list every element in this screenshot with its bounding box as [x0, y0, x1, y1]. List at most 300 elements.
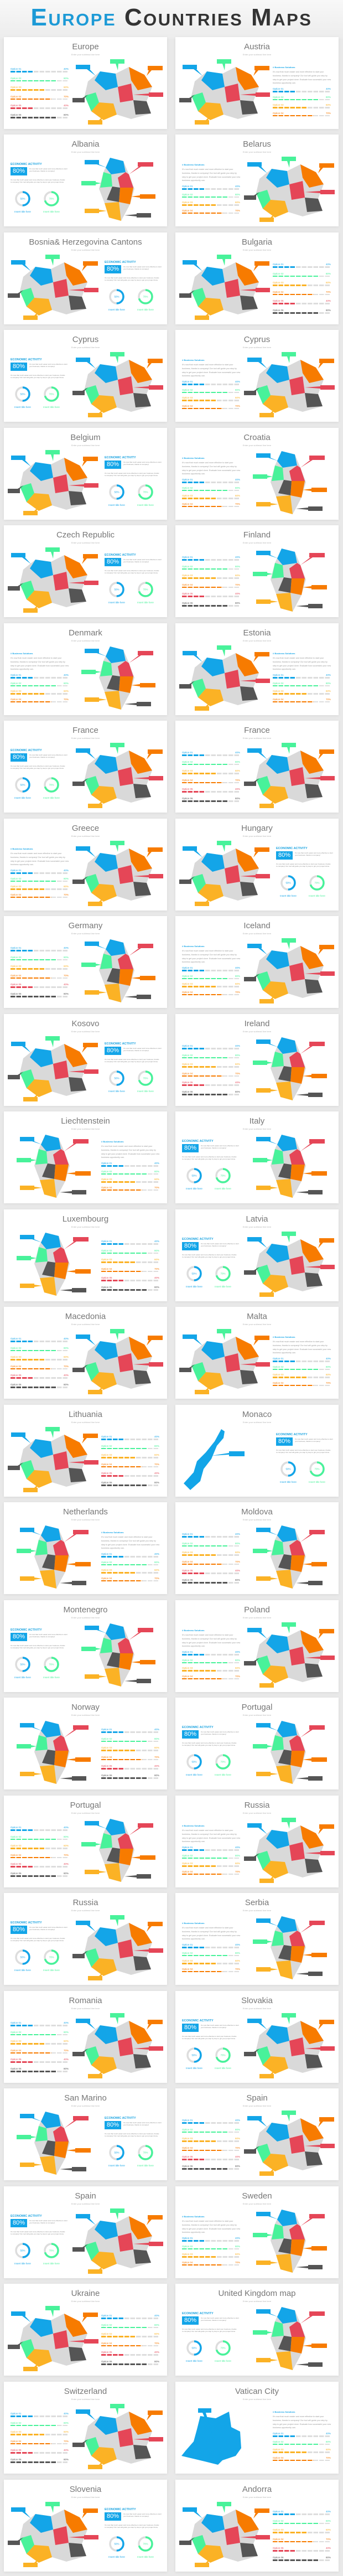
subhead: Enter your subhead line here [71, 1518, 100, 1521]
options chart: Option 05 [101, 2351, 112, 2353]
panel: Portugal (economic) [175, 1698, 339, 1789]
business text block: 40% [154, 1553, 159, 1555]
economic activity block: 80% [107, 558, 119, 565]
business text block [182, 1922, 241, 1977]
panel: Croatia [175, 428, 339, 520]
economic activity block: 50% [114, 1077, 119, 1079]
title: Slovakia [241, 1996, 273, 2005]
map [179, 645, 270, 711]
business text block: Option 04 [182, 1967, 193, 1970]
options chart: Option 04 [101, 1756, 112, 1758]
economic activity block: 50% [114, 296, 119, 298]
economic activity block [182, 2019, 242, 2070]
options chart: 40% [326, 2547, 331, 2549]
business text block: 70% [64, 893, 69, 896]
business text block: Option 02 [182, 1854, 193, 1856]
options chart: 80% [64, 2422, 69, 2424]
options chart: Option 02 [11, 1347, 22, 1349]
options chart: Option 01 [182, 1044, 193, 1047]
economic activity block: 80% [184, 2317, 196, 2324]
economic activity block: Insert title here [108, 2556, 125, 2558]
business text block: 70% [235, 503, 240, 505]
options chart: Option 03 [101, 1258, 112, 1261]
title: Czech Republic [56, 530, 115, 540]
economic activity block [182, 2312, 242, 2363]
options chart: Option 04 [182, 583, 193, 586]
subhead: Enter your subhead line here [243, 2007, 271, 2010]
title: Vatican City [235, 2387, 279, 2396]
business text block: # Business Solutions [101, 1531, 123, 1534]
options chart: Option 02 [11, 2031, 22, 2034]
business text block: Option 03 [182, 1959, 193, 1962]
options chart: 80% [235, 565, 240, 568]
economic activity block: Insert title here [43, 1676, 60, 1679]
panel: Czech Republic [4, 525, 167, 617]
business text block: Option 02 [182, 1952, 193, 1954]
options chart: Option 02 [182, 565, 193, 568]
subhead: Enter your subhead line here [243, 151, 271, 153]
title: Croatia [243, 433, 271, 442]
business text block: Option 02 [101, 1170, 112, 1172]
options chart: Option 06 [11, 1872, 22, 1875]
business text block: 80% [154, 1170, 159, 1172]
business text block: 80% [326, 95, 331, 99]
economic activity block: It's now that much easier and more effective to start your business, thanks to company! Our tool will guide you step by step to get your project done. [11, 1937, 65, 1942]
map [178, 2403, 271, 2471]
options chart: 80% [326, 309, 331, 312]
title: Russia [245, 1801, 269, 1810]
map [7, 1230, 100, 1299]
panel: Liechtenstein [4, 1111, 167, 1203]
options chart: Option 04 [101, 1463, 112, 1466]
options chart: 80% [64, 1835, 69, 1838]
options chart: 80% [64, 2031, 69, 2034]
options chart: Option 01 [101, 1435, 112, 1438]
economic activity block: It's now that much easier and more effective to start your business, thanks to company! Our tool will guide you step by step to get your project done. [105, 277, 159, 281]
business text block: 40% [326, 2432, 331, 2435]
economic activity block: 70% [314, 1468, 320, 1470]
economic activity block: It's now that much easier and more effective to start your business, thanks to company! Our tool will guide you step by step to get your project done. [182, 2328, 236, 2332]
map [7, 2501, 100, 2569]
economic activity block: It's now that much easier and more effective to start your business, thanks to company! Our tool will guide you step by step to get your project done. [11, 179, 65, 183]
options chart: 80% [154, 1445, 159, 1447]
map [7, 1523, 100, 1592]
business text block: 70% [64, 697, 69, 701]
options chart: 40% [235, 788, 240, 790]
business text block: It's now that much easier and more effective to start your business, thanks to company! Our tool will guide you step by step to get your project done. Evaluate how successful your new business opportunity can. [182, 1634, 240, 1647]
economic activity block: ECONOMIC ACTIVITY [182, 1726, 214, 1729]
options chart: Option 06 [11, 1383, 22, 1386]
options chart: Option 03 [11, 1844, 22, 1847]
economic activity block: Insert title here [215, 2067, 231, 2070]
options chart: Option 04 [101, 2342, 112, 2345]
title: Latvia [246, 1214, 268, 1224]
title: United Kingdom map [218, 2289, 296, 2298]
economic activity block: Insert title here [108, 1090, 125, 1093]
subhead: Enter your subhead line here [243, 1127, 271, 1130]
options chart: 70% [64, 95, 69, 98]
options chart: Option 04 [11, 1854, 22, 1856]
business text block: 70% [235, 2261, 240, 2264]
economic activity block [11, 2215, 70, 2265]
business text block: 80% [235, 974, 240, 977]
options chart: Option 05 [101, 1472, 112, 1475]
title: Kosovo [71, 1019, 100, 1028]
map [71, 2403, 164, 2471]
business text block: # Business Solutions [182, 163, 204, 166]
title: Poland [244, 1605, 270, 1615]
map [243, 1523, 336, 1592]
options chart: Option 01 [273, 2510, 284, 2513]
options chart [11, 2412, 69, 2468]
options chart: 60% [64, 1844, 69, 1847]
subhead: Enter your subhead line here [243, 1616, 271, 1619]
options chart: 70% [235, 779, 240, 782]
economic activity block: It's now that much easier and more effective to start your business, thanks to company! [123, 2513, 162, 2517]
economic activity block: 70% [143, 2543, 148, 2545]
options chart: Option 04 [182, 779, 193, 782]
options chart: Option 01 [11, 68, 22, 70]
economic activity block: Insert title here [215, 1285, 231, 1288]
economic activity block: Insert title here [108, 308, 125, 311]
options chart: 70% [64, 2440, 69, 2443]
options chart: 70% [64, 1365, 69, 1368]
business text block: It's now that much easier and more effective to start your business, thanks to company! Our tool will guide you step by step to get your project done. Evaluate how successful your new business opportunity can. [182, 364, 240, 377]
business text block: Option 04 [101, 1186, 112, 1189]
options chart: 60% [235, 1551, 240, 1554]
options chart: 40% [235, 1081, 240, 1084]
panel: France (economic) [4, 721, 167, 813]
subhead: Enter your subhead line here [243, 249, 271, 251]
business text block: # Business Solutions [273, 1336, 295, 1338]
options chart: Option 04 [11, 974, 22, 977]
economic activity block: 50% [114, 490, 119, 494]
options chart: 80% [235, 1579, 240, 1581]
subhead: Enter your subhead line here [243, 932, 271, 935]
business text block: 80% [235, 1952, 240, 1954]
map [243, 1719, 336, 1787]
options chart: 80% [235, 1542, 240, 1545]
business text block: It's now that much easier and more effective to start your business, thanks to company! Our tool will guide you step by step to get your project done. Evaluate how successful your new business opportunity can. [182, 1829, 240, 1843]
subhead: Enter your subhead line here [243, 2104, 271, 2107]
title: Andorra [242, 2485, 272, 2494]
options chart: 40% [64, 946, 69, 949]
panel: Norway [4, 1698, 167, 1789]
business text block: It's now that much easier and more effective to start your business, thanks to company! Our tool will guide you step by step to get your project done. Evaluate how successful your new business opportunity can. [273, 2415, 331, 2429]
options chart: 60% [64, 965, 69, 968]
economic activity block: Insert title here [43, 210, 60, 213]
title: Cyprus [72, 335, 98, 344]
economic activity block: 50% [191, 1175, 197, 1177]
panel: Spain (economic) [4, 2186, 167, 2278]
economic activity block: 50% [114, 2543, 119, 2545]
economic activity block: 50% [285, 1468, 291, 1470]
options chart: Option 01 [11, 2021, 22, 2024]
options chart: 60% [64, 2430, 69, 2433]
options chart [11, 1337, 69, 1393]
subhead: Enter your subhead line here [71, 444, 100, 447]
economic activity block: ECONOMIC ACTIVITY [276, 847, 308, 850]
title: Moldova [241, 1507, 273, 1517]
economic activity block: ECONOMIC ACTIVITY [276, 1433, 308, 1436]
panel: United Kingdom map [175, 2284, 339, 2376]
business text block: 40% [235, 1943, 240, 1946]
business text block: It's now that much easier and more effective to start your business, thanks to company! Our tool will guide you step by step to get your project done. Evaluate how successful your new business opportunity can. [182, 168, 240, 182]
options chart: 40% [64, 104, 69, 107]
economic activity block: 80% [184, 1731, 196, 1737]
title: Lithuania [69, 1410, 102, 1419]
economic activity block: Insert title here [137, 1090, 154, 1093]
business text block: Option 04 [11, 697, 22, 701]
options chart: Option 03 [182, 2137, 193, 2140]
panel: Ukraine [4, 2284, 167, 2376]
panel: Romania [4, 1991, 167, 2083]
options chart [273, 2510, 331, 2565]
economic activity block: 70% [220, 1175, 226, 1177]
options chart: 70% [235, 583, 240, 586]
economic activity block: It's now that much easier and more effective to start your business, thanks to company! Our tool will guide you step by step to get your project done. [105, 2133, 159, 2137]
business text block: Option 03 [11, 885, 22, 888]
map [253, 451, 327, 514]
title: Slovenia [70, 2485, 101, 2494]
economic activity block: 80% [13, 1633, 25, 1640]
economic activity block: 80% [184, 2024, 196, 2031]
subhead: Enter your subhead line here [71, 1127, 100, 1130]
economic activity block: ECONOMIC ACTIVITY [182, 1140, 214, 1143]
economic activity block: ECONOMIC ACTIVITY [105, 554, 136, 557]
options chart: 80% [64, 77, 69, 80]
economic activity block: Insert title here [137, 601, 154, 604]
business text block: Option 03 [273, 1373, 284, 1376]
subhead: Enter your subhead line here [71, 151, 100, 153]
options chart: Option 05 [101, 1276, 112, 1279]
options chart [182, 751, 240, 802]
options chart: 80% [235, 1054, 240, 1057]
economic activity block: 50% [20, 393, 25, 395]
options chart: Option 01 [182, 2119, 193, 2122]
subhead: Enter your subhead line here [71, 1030, 100, 1033]
map [243, 2012, 336, 2081]
options chart: 40% [235, 1569, 240, 1572]
options chart: Option 01 [11, 1826, 22, 1829]
options chart: 40% [235, 2155, 240, 2158]
economic activity block: Insert title here [280, 1481, 297, 1483]
business text block: Option 04 [182, 1675, 193, 1677]
map [243, 2109, 336, 2178]
business text block [182, 945, 240, 995]
options chart: 70% [235, 1072, 240, 1075]
business text block [182, 359, 240, 409]
options chart: Option 06 [11, 2067, 22, 2070]
economic activity block: ECONOMIC ACTIVITY [11, 2215, 42, 2218]
economic activity block: It's now that much easier and more effective to start your business, thanks to company! Our tool will guide you step by step to get your project done. [276, 863, 330, 867]
options chart: 80% [235, 1090, 240, 1093]
options chart: 70% [235, 1560, 240, 1563]
subhead: Enter your subhead line here [243, 1909, 271, 1912]
business text block: Option 01 [182, 1943, 193, 1946]
options chart: Option 03 [11, 86, 22, 89]
business text block: It's now that much easier and more effective to start your business, thanks to company! Our tool will guide you step by step to get your project done. Evaluate how successful your new business opportunity can. [273, 657, 331, 670]
subhead: Enter your subhead line here [243, 2202, 271, 2205]
title: Romania [69, 1996, 102, 2005]
economic activity block: 50% [114, 588, 119, 591]
title: Serbia [245, 1898, 269, 1907]
panel: Vatican City [175, 2382, 339, 2474]
business text block: Option 04 [182, 2261, 193, 2264]
panel: Russia (economic) [4, 1893, 167, 1985]
map [179, 59, 270, 125]
options chart: Option 03 [182, 769, 193, 772]
economic activity block: 70% [49, 1956, 54, 1958]
business text block [182, 1824, 241, 1880]
business text block: 60% [154, 1178, 159, 1181]
title: Luxembourg [63, 1214, 108, 1224]
options chart: Option 01 [182, 1533, 193, 1535]
options chart: Option 03 [11, 965, 22, 968]
economic activity block [105, 2508, 164, 2559]
options chart: Option 06 [182, 797, 193, 800]
business text block: Option 02 [273, 95, 284, 99]
options chart: 80% [64, 113, 69, 116]
economic activity block: ECONOMIC ACTIVITY [182, 2312, 214, 2315]
options chart: 70% [154, 1268, 159, 1270]
options chart: 60% [154, 2332, 159, 2335]
business text block: Option 04 [182, 1870, 193, 1873]
panel: Serbia [175, 1893, 339, 1985]
subhead: Enter your subhead line here [71, 2398, 100, 2401]
options chart: Option 02 [182, 1054, 193, 1057]
options chart: Option 02 [101, 1445, 112, 1447]
economic activity block: Insert title here [43, 1969, 60, 1972]
map [243, 1914, 336, 1983]
map [81, 158, 155, 221]
options chart: 40% [326, 263, 331, 266]
options chart: 60% [235, 1063, 240, 1065]
business text block: 40% [235, 478, 240, 481]
panel: Cyprus (economic) [4, 330, 167, 422]
panel: Latvia [175, 1209, 339, 1301]
business text block: 40% [154, 1162, 159, 1165]
business text block: 40% [235, 1651, 240, 1653]
business text block: # Business Solutions [11, 847, 33, 850]
economic activity block: 80% [107, 266, 119, 272]
subhead: Enter your subhead line here [71, 1225, 100, 1228]
business text block: Option 02 [182, 486, 193, 489]
options chart: 60% [326, 281, 331, 284]
subhead: Enter your subhead line here [243, 541, 271, 544]
economic activity block: ECONOMIC ACTIVITY [11, 163, 42, 166]
title: Monaco [242, 1410, 272, 1419]
economic activity block: 80% [107, 461, 119, 468]
economic activity block: It's now that much easier and more effective to start your business, thanks to company! Our tool will guide you step by step to get your project done. [105, 1058, 159, 1063]
options chart [101, 1435, 159, 1491]
subhead: Enter your subhead line here [71, 2202, 100, 2205]
panel: Switzerland [4, 2382, 167, 2474]
business text block: 70% [154, 1576, 159, 1580]
business text block: Option 01 [182, 1651, 193, 1653]
business text block: 80% [64, 877, 69, 880]
business text block: 60% [326, 690, 331, 692]
subhead: Enter your subhead line here [243, 1518, 271, 1521]
map [7, 1719, 100, 1787]
map [243, 1817, 336, 1885]
options chart: Option 06 [101, 2360, 112, 2363]
panel: Bosnia & Herzegovina Cantons [4, 232, 167, 324]
business text block: Option 03 [101, 1178, 112, 1181]
options chart: 70% [64, 2049, 69, 2052]
subhead: Enter your subhead line here [243, 1714, 271, 1716]
options chart: Option 06 [182, 602, 193, 604]
panel: Malta [175, 1307, 339, 1399]
business text block [11, 847, 69, 898]
options chart [11, 2021, 69, 2077]
options chart: 40% [154, 1765, 159, 1767]
panel: Denmark [4, 623, 167, 715]
business text block: 70% [235, 991, 240, 993]
title: Germany [69, 921, 102, 930]
options chart: 60% [326, 2528, 331, 2531]
options chart: 60% [154, 1258, 159, 1261]
subhead: Enter your subhead line here [243, 1225, 271, 1228]
economic activity block: It's now that much easier and more effective to start your business, thanks to company! [295, 852, 333, 856]
options chart: 80% [64, 1347, 69, 1349]
economic activity block: Insert title here [43, 2262, 60, 2265]
business text block [182, 2215, 241, 2270]
options chart: 60% [64, 2040, 69, 2042]
business text block: Option 01 [182, 478, 193, 481]
options chart: 40% [64, 68, 69, 70]
map [71, 1817, 164, 1885]
business text block: It's now that much easier and more effective to start your business, thanks to company! Our tool will guide you step by step to get your project done. Evaluate how successful your new business opportunity can. [101, 1145, 159, 1158]
options chart: 80% [64, 1383, 69, 1386]
options chart: Option 02 [101, 1737, 112, 1740]
business text block: Option 02 [11, 682, 22, 684]
economic activity block [11, 163, 67, 213]
subhead: Enter your subhead line here [243, 444, 271, 447]
business text block: Option 02 [182, 1658, 193, 1662]
economic activity block: It's now that much easier and more effective to start your business, thanks to company! [29, 2220, 67, 2224]
options chart: Option 05 [11, 104, 22, 107]
panel: Spain (options) [175, 2088, 339, 2180]
options chart: Option 05 [273, 299, 284, 302]
business text block: # Business Solutions [182, 945, 204, 948]
economic activity block: 80% [278, 1438, 290, 1445]
economic activity block: 80% [278, 852, 290, 858]
business text block: It's now that much easier and more effective to start your business, thanks to company! Our tool will guide you step by step to get your project done. Evaluate how successful your new business opportunity can. [273, 71, 331, 84]
subhead: Enter your subhead line here [71, 1812, 100, 1814]
map [72, 59, 163, 125]
options chart [182, 2119, 240, 2174]
title: Italy [250, 1116, 264, 1126]
options chart: Option 01 [101, 2314, 112, 2317]
subhead: Enter your subhead line here [71, 2496, 100, 2499]
options chart: 80% [154, 1774, 159, 1777]
panel: Monaco [175, 1405, 339, 1497]
economic activity block: 70% [49, 393, 54, 395]
options chart: 40% [64, 983, 69, 986]
options chart: Option 03 [273, 281, 284, 284]
economic activity block [182, 1140, 242, 1191]
business text block: 40% [64, 674, 69, 676]
options chart: 80% [64, 992, 69, 995]
title: Belarus [243, 139, 271, 149]
business text block: Option 04 [182, 503, 193, 505]
business text block: Option 01 [101, 1553, 112, 1555]
economic activity block: It's now that much easier and more effective to start your business, thanks to company! [123, 2122, 162, 2126]
options chart: 40% [154, 1728, 159, 1731]
options chart [101, 1728, 159, 1783]
panel: France (options) [175, 721, 339, 813]
